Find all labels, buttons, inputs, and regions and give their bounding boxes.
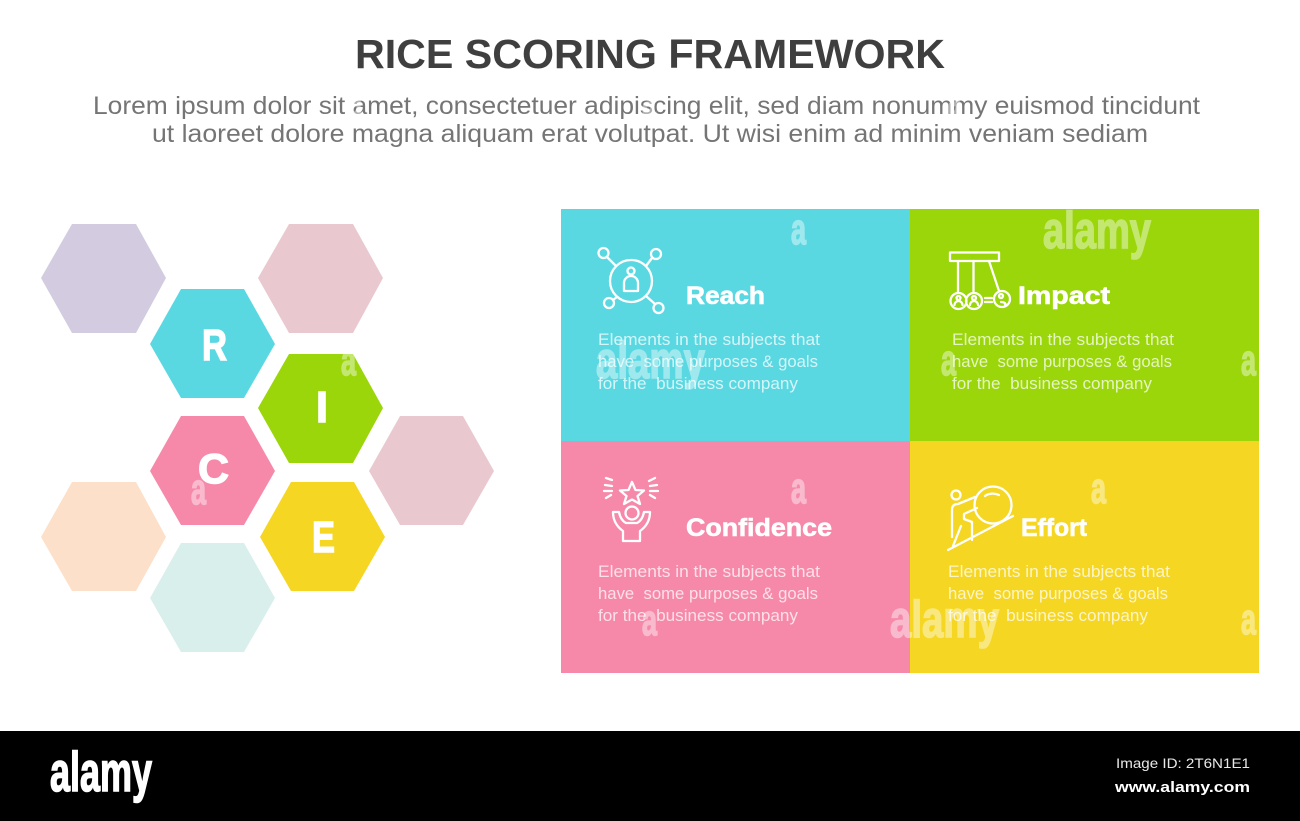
watermarks: alamy bbox=[1043, 202, 1151, 260]
watermarks: a bbox=[341, 336, 356, 385]
watermarks: a bbox=[1241, 336, 1256, 385]
hexagon: E bbox=[260, 482, 385, 591]
title: RICE SCORING FRAMEWORK bbox=[355, 31, 945, 77]
hexagon: lilac decorative bbox=[41, 224, 166, 333]
hexagon: R bbox=[150, 289, 275, 398]
panel: reach bbox=[561, 209, 910, 441]
watermarks: a bbox=[642, 77, 656, 126]
watermarks: a bbox=[1241, 595, 1256, 644]
panel: impact bbox=[910, 209, 1259, 441]
watermarks: alamy bbox=[890, 591, 999, 649]
footer bar bbox=[0, 731, 1300, 821]
heading: impact: Impact bbox=[1018, 282, 1111, 310]
image id: Image ID: 2T6N1E1 bbox=[1116, 755, 1250, 771]
hexagon: mint decorative bbox=[150, 543, 275, 652]
hexagon: peach decorative bbox=[41, 482, 166, 591]
website: www.alamy.com bbox=[1114, 779, 1250, 796]
watermarks: a bbox=[1091, 464, 1106, 513]
watermarks: a bbox=[791, 205, 806, 254]
text: confidence description: for the business company bbox=[598, 606, 798, 625]
honeycomb diagram bbox=[41, 224, 494, 652]
watermarks: a bbox=[791, 464, 806, 513]
hexagon: R: R bbox=[202, 321, 227, 370]
icon: confidence star and person bbox=[604, 478, 658, 541]
heading: reach: Reach bbox=[686, 282, 765, 310]
hexagon: I bbox=[258, 354, 383, 463]
watermarks: a bbox=[947, 77, 961, 126]
text: impact description: Elements in the subjects that bbox=[952, 330, 1174, 349]
hexagon: C: C bbox=[198, 445, 229, 492]
watermarks bbox=[191, 77, 1256, 649]
text: effort description: Elements in the subjects that bbox=[948, 562, 1170, 581]
watermarks: alamy bbox=[596, 332, 705, 390]
text: impact description bbox=[952, 330, 1174, 393]
text: reach description: have some purposes & goals bbox=[598, 352, 818, 371]
text: confidence description: Elements in the subjects that bbox=[598, 562, 820, 581]
text: reach description: for the business company bbox=[598, 374, 798, 393]
watermarks: a bbox=[642, 596, 657, 645]
text: reach description: Elements in the subjects that bbox=[598, 330, 820, 349]
watermarks: a bbox=[191, 465, 206, 514]
icon: effort boulder bbox=[948, 486, 1013, 550]
footer logo: alamy bbox=[50, 740, 152, 803]
hexagon: rose decorative right bbox=[369, 416, 494, 525]
text: confidence description: have some purposes & goals bbox=[598, 584, 818, 603]
subtitle text: ut laoreet dolore magna aliquam erat volutpat. Ut wisi enim ad minim veniam sediam bbox=[152, 120, 1148, 148]
text: effort description bbox=[948, 562, 1170, 625]
text: impact description: have some purposes & goals bbox=[952, 352, 1172, 371]
hexagon: C bbox=[150, 416, 275, 525]
text: reach description bbox=[598, 330, 820, 393]
text: impact description: for the business company bbox=[952, 374, 1152, 393]
subtitle text: Lorem ipsum dolor sit amet, consectetuer adipiscing elit, sed diam nonummy euismod tincidunt bbox=[93, 92, 1200, 120]
heading: effort: Effort bbox=[1021, 514, 1088, 542]
panel: effort bbox=[910, 441, 1259, 673]
icon: reach network bbox=[598, 248, 664, 313]
subtitle text bbox=[93, 92, 1200, 148]
hexagon: rose decorative top bbox=[258, 224, 383, 333]
text: confidence description bbox=[598, 562, 820, 625]
hexagon: E: E bbox=[312, 513, 335, 562]
hexagon: I: I bbox=[316, 383, 328, 432]
watermarks: a bbox=[941, 336, 956, 385]
heading: confidence: Confidence bbox=[686, 514, 832, 542]
panel: confidence bbox=[561, 441, 910, 673]
text: effort description: for the business company bbox=[948, 606, 1148, 625]
watermarks: a bbox=[348, 77, 362, 126]
icon: impact pendulum bbox=[950, 252, 1010, 309]
text: effort description: have some purposes & goals bbox=[948, 584, 1168, 603]
